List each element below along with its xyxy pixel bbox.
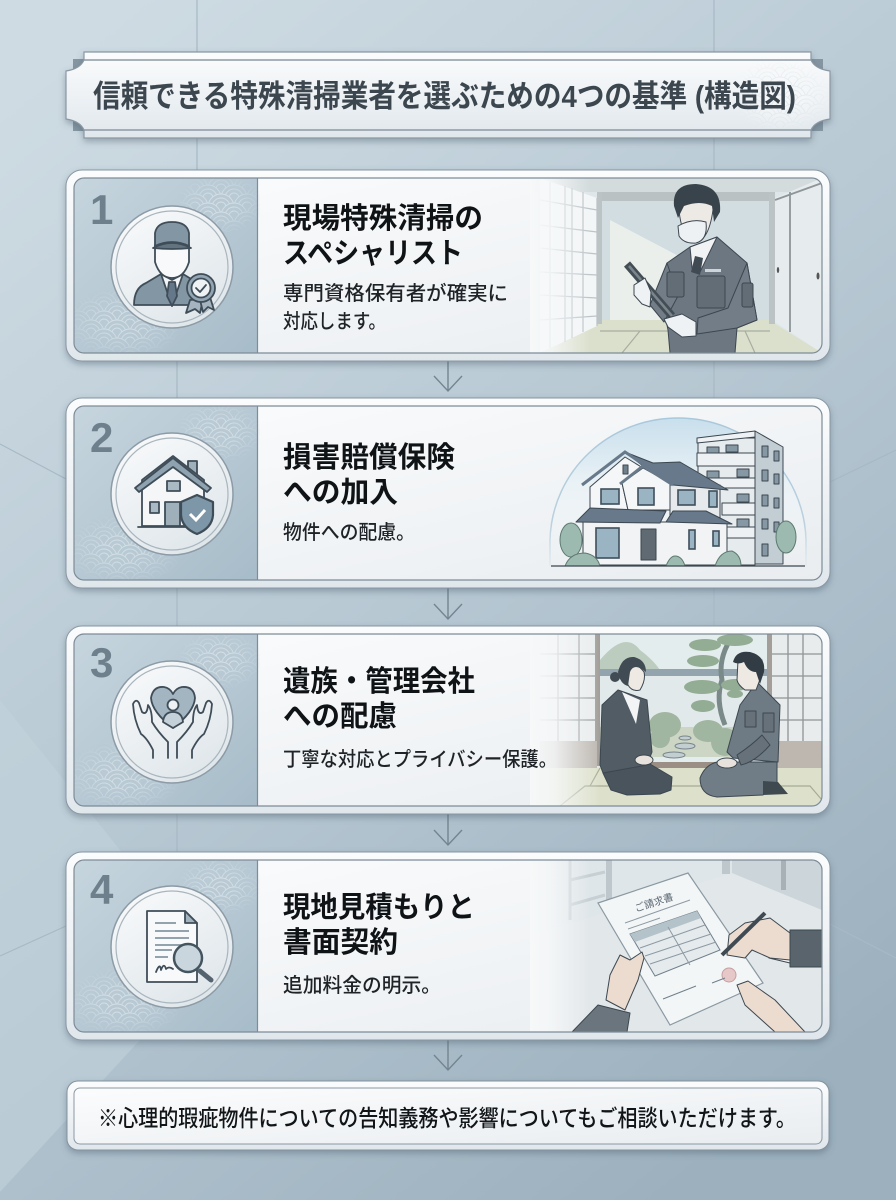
technician figure <box>627 184 757 353</box>
panel: criterion 1 <box>66 170 830 361</box>
number 1: 1 <box>90 186 113 233</box>
illustration: house and apartment under protective dome <box>550 418 806 566</box>
heading 4 <box>283 891 475 959</box>
document <box>598 873 763 1025</box>
heading 4: 現地見積もりと <box>283 891 475 924</box>
heading 2: 損害賠償保険 <box>283 441 455 474</box>
heading 2 <box>283 441 455 509</box>
illustration: signing estimate document <box>530 860 822 1032</box>
heading 3: 遺族・管理会社 <box>283 665 475 698</box>
heading 3: への配慮 <box>283 700 397 733</box>
heading 1: 現場特殊清掃の <box>283 202 483 235</box>
icon: document with magnifier <box>111 886 233 1008</box>
heading 3 <box>283 665 475 733</box>
connector arrow 3 <box>434 814 462 845</box>
icon: hands holding heart <box>111 661 233 783</box>
panel: criterion 3 <box>66 626 830 814</box>
icon: certified worker <box>111 206 233 328</box>
footer note box <box>67 1081 829 1150</box>
panel: criterion 4 <box>66 852 830 1040</box>
heading 2: への加入 <box>283 476 398 509</box>
body text 4: 追加料金の明示。 <box>283 974 441 997</box>
body text 2: 物件への配慮。 <box>283 521 415 544</box>
footer note text: ※心理的瑕疵物件についての告知義務や影響についてもご相談いただけます。 <box>98 1105 796 1131</box>
heading 1: スペシャリスト <box>283 238 463 270</box>
icon: house with shield <box>111 433 233 555</box>
number 2: 2 <box>90 414 113 461</box>
body text 1: 専門資格保有者が確実に <box>283 282 508 305</box>
body text 1 <box>283 282 508 333</box>
number 4: 4 <box>90 866 114 913</box>
connector arrow 1 <box>434 361 462 391</box>
man in work uniform <box>700 652 788 797</box>
connector arrow 4 <box>434 1040 462 1070</box>
document: ご請求書 <box>633 890 675 915</box>
body text 1: 対応します。 <box>283 310 386 333</box>
body text 3: 丁寧な対応とプライバシー保護。 <box>283 748 557 771</box>
hands and pen <box>572 913 822 1032</box>
illustration: consultation on tatami with garden view <box>530 634 822 806</box>
connector arrow 2 <box>434 588 462 619</box>
number 3: 3 <box>90 639 113 686</box>
illustration: technician in tatami room <box>530 178 822 353</box>
woman in black suit <box>600 657 672 795</box>
title banner <box>66 52 830 138</box>
heading 1 <box>283 202 483 270</box>
title text: 信頼できる特殊清掃業者を選ぶための4つの基準 (構造図) <box>93 79 796 114</box>
panel: criterion 2 <box>66 398 830 588</box>
heading 4: 書面契約 <box>283 926 398 959</box>
